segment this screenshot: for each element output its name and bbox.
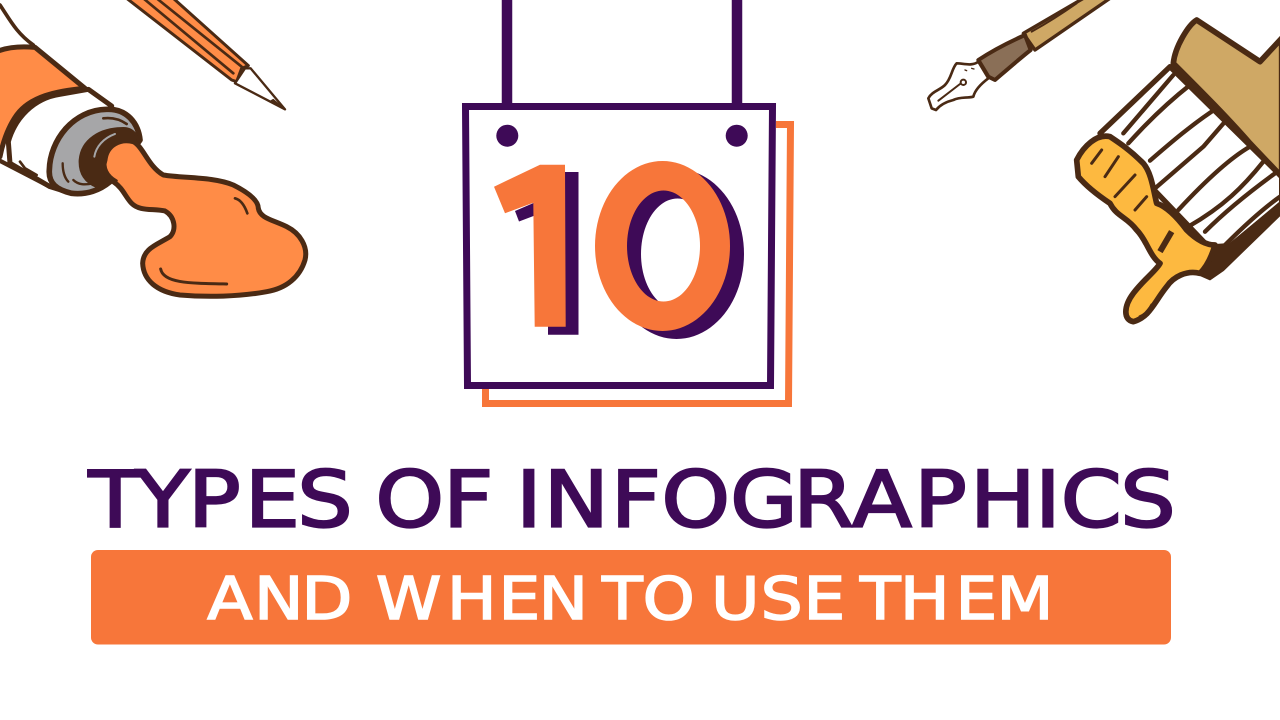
orange offset frame — [486, 124, 790, 404]
subtitle banner — [91, 550, 1171, 644]
subtitle text: TO — [601, 565, 695, 633]
number 10 — [494, 161, 730, 331]
subtitle text: USE — [711, 565, 845, 633]
icon: paint brush dripping yellow paint — [1077, 20, 1280, 322]
title: types of infographics: TYPES — [87, 454, 353, 546]
title: types of infographics: INFOGRAPHICS — [516, 454, 1176, 546]
title: types of infographics — [87, 454, 1176, 546]
calendar: hanging sign with number 10 — [466, 0, 790, 404]
icon: pencil — [127, 0, 285, 109]
subtitle text: WHEN — [376, 565, 588, 633]
icon: paint tube with spilled orange paint — [0, 5, 306, 296]
hanging holes — [496, 125, 748, 147]
icon: fountain pen — [928, 0, 1110, 110]
title: types of infographics: OF — [375, 454, 493, 546]
subtitle text: AND — [207, 565, 352, 633]
subtitle text — [207, 565, 1054, 633]
purple frame — [466, 106, 772, 386]
hanging straps — [507, 0, 737, 106]
subtitle text: THEM — [859, 565, 1054, 633]
number shadow — [515, 169, 744, 339]
